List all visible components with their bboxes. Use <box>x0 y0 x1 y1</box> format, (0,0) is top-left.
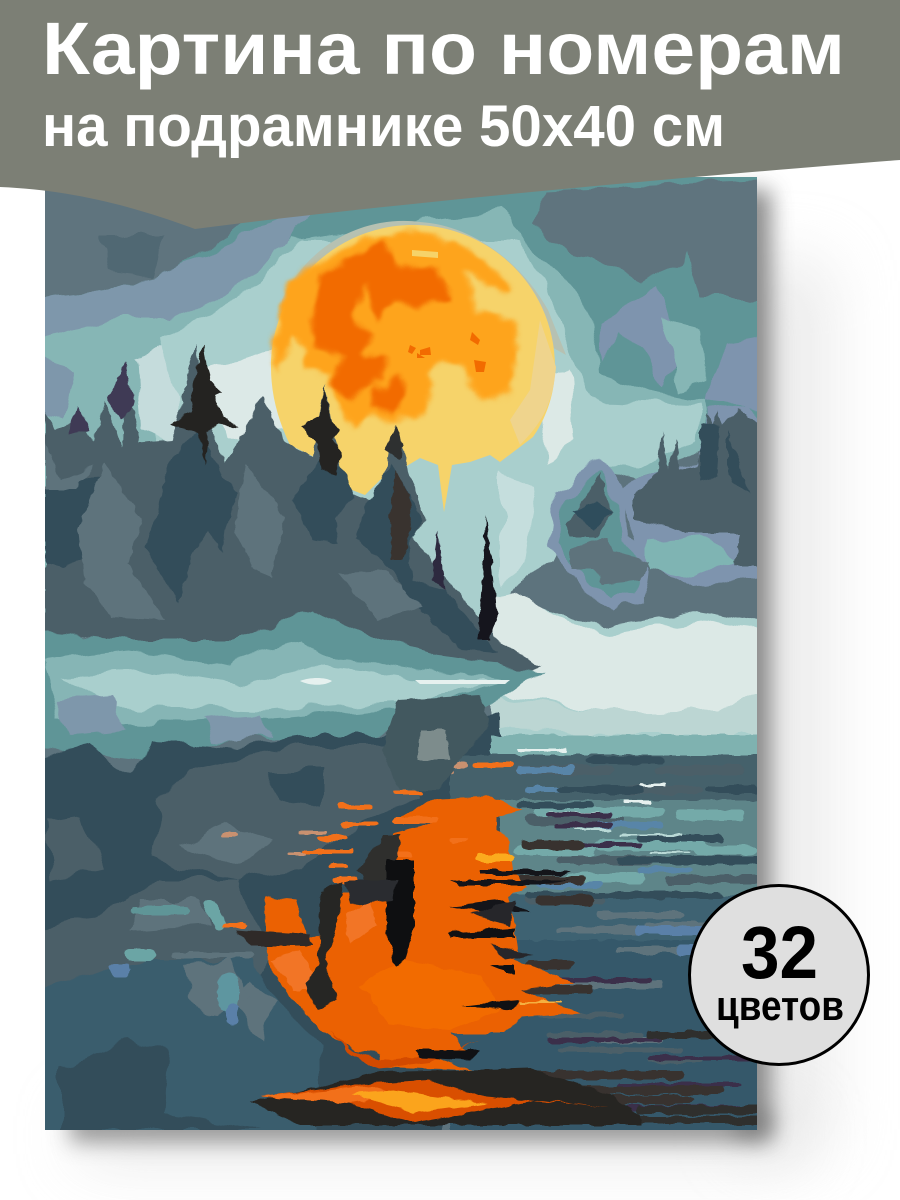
mist band <box>30 610 540 760</box>
sky and mist <box>30 170 780 640</box>
forest <box>45 345 542 680</box>
fir trees <box>68 345 497 640</box>
badge: 32 colours <box>690 886 868 1064</box>
title: Картина по номерам <box>42 7 845 90</box>
left water ripples <box>115 905 250 1020</box>
badge: 32 colours: 32 <box>741 911 818 994</box>
bottom orange reflection <box>261 1080 611 1123</box>
water ripples <box>519 750 760 1120</box>
dark tree reflections <box>235 695 640 1125</box>
moon <box>271 221 566 512</box>
moon reflection <box>264 797 579 1070</box>
right forest and clouds <box>547 405 770 612</box>
mist over right water <box>490 592 757 737</box>
painting: moon over misty forest lake <box>30 170 780 1140</box>
mist highlight <box>300 678 510 685</box>
lake dark shore <box>30 715 500 1140</box>
header banner <box>0 0 900 229</box>
subtitle: на подрамнике 50х40 см <box>42 94 725 159</box>
canvas shadow <box>70 190 830 1160</box>
badge: 32 colours: цветов <box>716 982 844 1029</box>
right dark trees <box>567 409 765 584</box>
reflection ripples <box>222 733 560 1002</box>
right water <box>450 735 770 1135</box>
